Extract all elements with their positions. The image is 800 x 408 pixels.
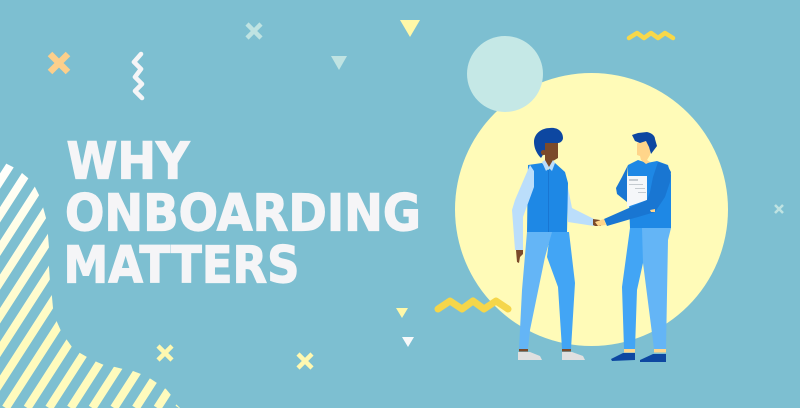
left man head [534, 128, 563, 168]
left man shoes [518, 349, 585, 360]
title: MATTERS [64, 237, 300, 296]
icon: yellow cross lower left [158, 346, 172, 360]
title: ONBOARDING [65, 185, 421, 244]
left man trousers [519, 232, 575, 349]
right man shoes [611, 349, 666, 362]
left man hand [593, 219, 601, 226]
icon: white squiggle [134, 54, 142, 98]
document [627, 176, 647, 207]
icon: orange cross [50, 54, 68, 72]
icon: pale cross [247, 24, 261, 38]
figure: right man [595, 132, 671, 362]
left man upper arm [512, 165, 534, 250]
icon: gold squiggle lower [438, 301, 508, 309]
icon: white triangle small [402, 337, 414, 347]
left man hanging hand [516, 250, 523, 263]
icon: pale triangle [331, 56, 347, 70]
icon: yellow triangle small [396, 308, 408, 318]
pale circle [467, 36, 543, 112]
right man torso [628, 160, 671, 228]
left man forearm [566, 178, 594, 226]
icon: small pale cross right [775, 205, 783, 213]
figure: left man [512, 128, 601, 360]
right man near arm [604, 162, 671, 226]
title [64, 133, 421, 296]
title: WHY [66, 133, 190, 192]
icon: yellow triangle top [400, 20, 420, 37]
large yellow circle [455, 73, 728, 346]
icon: gold squiggle top [629, 33, 673, 38]
striped blob [0, 164, 180, 408]
right man trousers [622, 228, 671, 349]
left man vest [527, 160, 568, 232]
right man far arm [616, 165, 628, 202]
right man tucked hand [650, 209, 655, 212]
right man head [632, 132, 657, 164]
icon: yellow cross lower middle [298, 354, 312, 368]
right man hand [595, 219, 606, 226]
